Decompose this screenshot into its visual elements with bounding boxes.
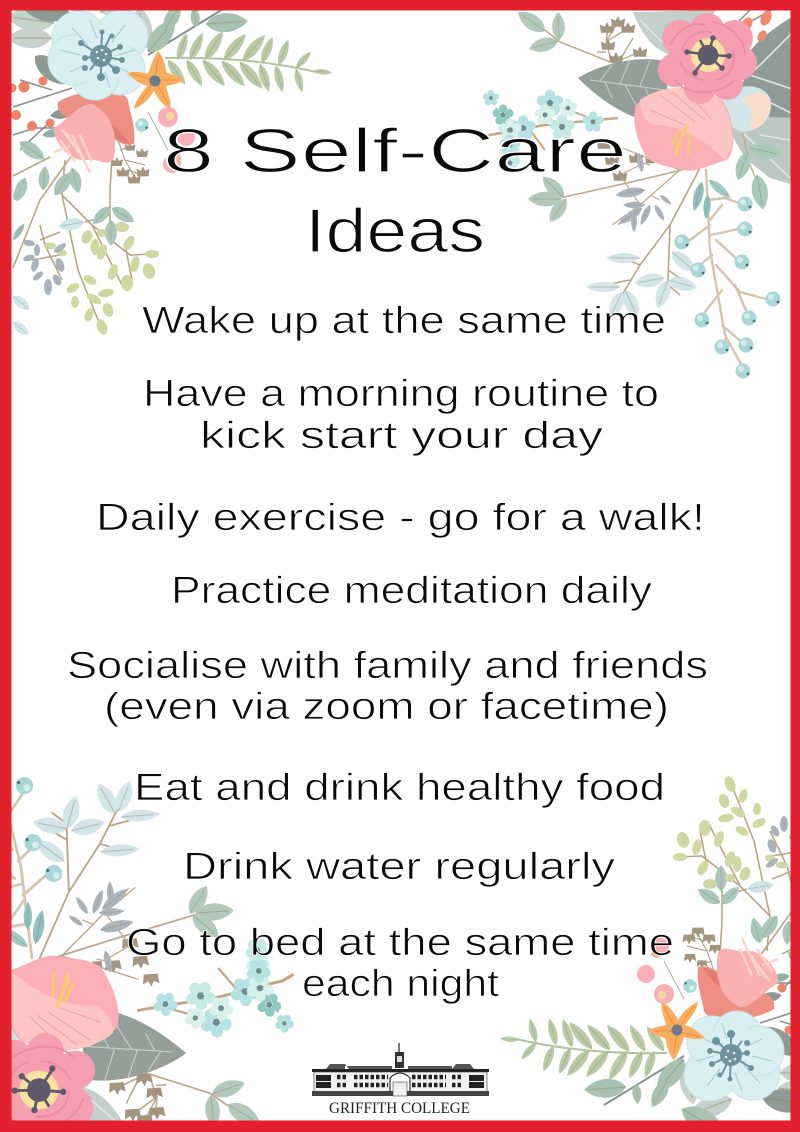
title: 8 Self-Care (163, 117, 627, 186)
idea 6: Eat and drink healthy food (134, 767, 665, 809)
idea 8: Go to bed at the same time (126, 922, 674, 964)
idea 5 (67, 645, 708, 728)
idea 8: each night (302, 963, 499, 1005)
idea 5: Socialise with family and friends (67, 645, 708, 687)
idea list (67, 300, 708, 1005)
idea 2: Have a morning routine to (143, 373, 659, 415)
idea 8 (126, 922, 674, 1005)
idea 2 (143, 373, 659, 457)
idea 3: Daily exercise - go for a walk! (96, 497, 705, 539)
floral corner: bottom left (0, 701, 304, 1132)
idea 5: (even via zoom or facetime) (104, 686, 669, 728)
title (163, 117, 627, 266)
floral corner: top left (5, 0, 332, 338)
idea 4: Practice meditation daily (171, 570, 652, 612)
floral corner: top right (480, 5, 795, 378)
title: Ideas (305, 197, 485, 266)
logo wordmark: GRIFFITH COLLEGE (329, 1100, 470, 1117)
icon: college building (312, 1043, 489, 1096)
logo: Griffith College (312, 1043, 489, 1117)
idea 1: Wake up at the same time (142, 300, 666, 342)
floral corner: bottom right (500, 773, 800, 1132)
idea 2: kick start your day (200, 415, 603, 457)
idea 7: Drink water regularly (183, 846, 615, 888)
